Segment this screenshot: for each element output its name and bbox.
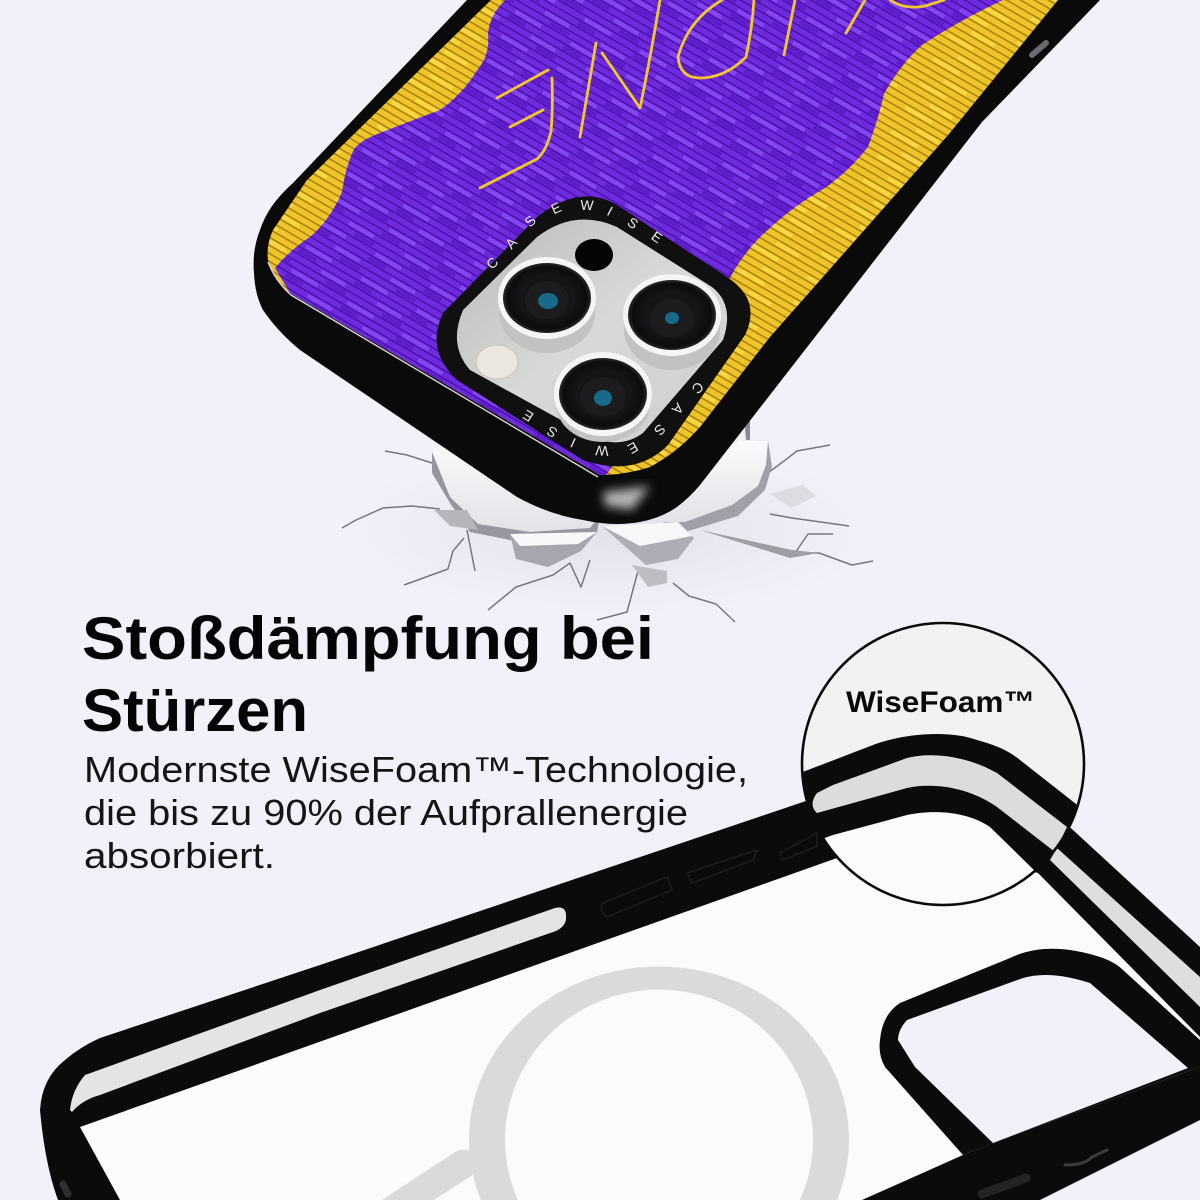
translucent gap left	[70, 907, 566, 1112]
body text: die bis zu 90% der Aufprallenergie	[84, 792, 688, 833]
yellow back	[268, 0, 1058, 475]
body text	[84, 749, 748, 876]
clear case with black frame	[40, 765, 1200, 1200]
side buttons	[601, 833, 817, 917]
right plate	[660, 440, 772, 532]
case bumper	[254, 0, 1100, 524]
illustration: cracked ground impact	[340, 416, 880, 622]
black frame	[40, 765, 1200, 1200]
thin edge highlight	[268, 262, 598, 477]
casewise ring text bottom: E	[520, 407, 536, 425]
flash	[476, 345, 518, 379]
purple wave	[275, 0, 1003, 475]
left plate	[432, 452, 600, 544]
script lettering	[480, 0, 944, 188]
heading	[82, 605, 654, 744]
corner highlight	[603, 486, 650, 510]
casewise ring text bottom: C	[689, 379, 707, 397]
casewise ring text bottom: E	[625, 439, 641, 457]
side button	[1032, 43, 1046, 55]
casewise ring text bottom: S	[544, 423, 560, 441]
camera plateau	[457, 219, 727, 442]
magsafe pill	[382, 1150, 478, 1200]
casewise ring text bottom: A	[669, 400, 687, 418]
heading: Stürzen	[82, 677, 308, 744]
body text: absorbiert.	[84, 835, 275, 876]
casewise ring text top: A	[502, 234, 520, 252]
casewise ring text top: S	[521, 212, 539, 230]
casewise ring text top: E	[548, 199, 564, 217]
phone with purple and yellow case	[254, 0, 1100, 524]
casewise ring text bottom: W	[594, 443, 609, 459]
callout label: WiseFoam™	[846, 686, 1035, 719]
casewise ring text bottom	[520, 379, 707, 459]
casewise ring text top: S	[625, 214, 641, 232]
lens 2	[623, 274, 721, 370]
sensor hole	[575, 239, 613, 271]
body text: Modernste WiseFoam™-Technologie,	[84, 749, 748, 790]
heading: Stoßdämpfung bei	[82, 605, 654, 672]
magnified interior	[824, 812, 1034, 904]
bottom ports	[1065, 1150, 1107, 1165]
lens 3	[554, 352, 652, 442]
casewise ring text top: E	[649, 228, 665, 246]
camera surround	[437, 196, 751, 466]
casewise ring text top: W	[580, 197, 595, 213]
lens 1	[498, 257, 596, 353]
magnified translucent gap	[812, 755, 1067, 852]
casewise ring text bottom: S	[651, 421, 669, 439]
callout circle with magnified frame	[790, 623, 1090, 905]
camera cutout frame	[880, 949, 1200, 1155]
clear interior	[80, 850, 1200, 1200]
camera cutout opening	[898, 975, 1188, 1143]
casewise ring text top	[483, 197, 665, 272]
casewise ring text bottom: I	[568, 435, 578, 451]
magnified black frame	[804, 734, 1077, 870]
translucent gap right	[1050, 848, 1200, 1007]
magsafe ring	[469, 966, 849, 1200]
casewise ring text top: I	[605, 203, 615, 219]
fragments	[510, 532, 597, 567]
casewise ring text top: C	[483, 254, 501, 272]
